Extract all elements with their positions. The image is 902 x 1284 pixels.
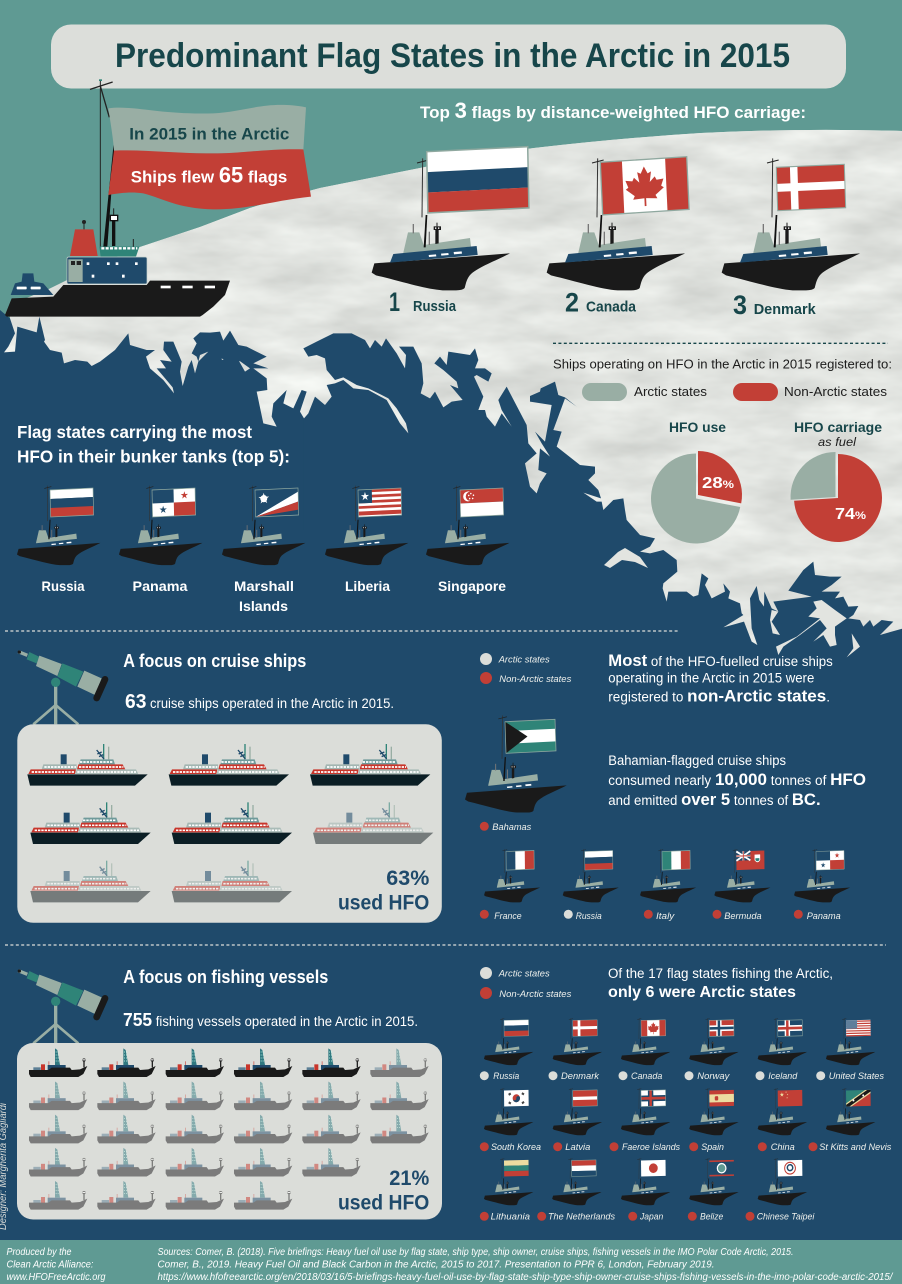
cruise flag: Italy bbox=[640, 849, 696, 922]
text: most cruise ships: Most of the HFO-fuelled cruise ships bbox=[608, 651, 833, 670]
text: most cruise ships bbox=[608, 651, 833, 706]
text: Bahamian-flagged: and emitted over 5 tonnes of BC. bbox=[608, 790, 821, 809]
top 3 heading: Top 3 flags by distance-weighted HFO carriage: bbox=[420, 98, 806, 123]
rank 2 Canada: 2 bbox=[565, 288, 579, 318]
text: 17 flag states: Of the 17 flag states fishing the Arctic, bbox=[608, 966, 833, 981]
flag ship: Latvia bbox=[553, 1088, 602, 1153]
producer credit: www.HFOFreeArctic.org bbox=[6, 1272, 106, 1283]
flag text: In 2015 in the Arctic bbox=[129, 124, 289, 144]
flag ship: Lithuania: Lithuania bbox=[491, 1212, 530, 1222]
flag ship: Chinese Taipei: Chinese Taipei bbox=[757, 1212, 815, 1222]
rank 3 Denmark bbox=[722, 158, 860, 320]
Bahamas ship: Bahamas bbox=[492, 822, 532, 833]
flag ship: Belize bbox=[688, 1158, 739, 1222]
top 5: Russia bbox=[17, 486, 100, 594]
pie chart: HFO carriage: 74% bbox=[835, 506, 866, 523]
heading: focus on fishing vessels: A focus on fishing vessels bbox=[123, 967, 328, 987]
flag text: Ships flew 65 flags bbox=[131, 162, 287, 188]
rank 2 Canada bbox=[547, 157, 689, 318]
legend: fishing bbox=[480, 967, 572, 1000]
top 5: Liberia: Liberia bbox=[345, 578, 390, 594]
stat: 63% used HFO: 63% bbox=[386, 867, 430, 890]
flag ship: The Netherlands: The Netherlands bbox=[548, 1212, 615, 1222]
text: Bahamian-flagged: Bahamian-flagged cruise ships bbox=[608, 753, 786, 768]
stat: 21% used HFO bbox=[338, 1167, 430, 1214]
sources bbox=[158, 1247, 894, 1283]
producer credit: Clean Arctic Alliance: bbox=[6, 1260, 94, 1270]
flag ship: South Korea bbox=[480, 1088, 541, 1153]
fishing flags row 1 bbox=[480, 1018, 884, 1082]
flag ship: Canada bbox=[618, 1018, 670, 1082]
cruise flag: France: France bbox=[494, 911, 522, 922]
title bbox=[51, 24, 846, 88]
rank 3 Denmark: 3 bbox=[733, 290, 747, 320]
sources: Sources: Comer, B. (2018). Five briefings: Heavy fuel oil use by flag state, ship type, ship owner, cruise ships, fishing vessels in the IMO Polar Code Arctic, 2015. bbox=[158, 1247, 794, 1258]
flag ship: Faeroe Islands: Faeroe Islands bbox=[622, 1142, 680, 1153]
registered-to legend: Non-Arctic states bbox=[784, 384, 888, 399]
top 5: Liberia bbox=[325, 486, 408, 594]
text: Bahamian-flagged: consumed nearly 10,000 tonnes of HFO bbox=[608, 770, 866, 789]
flag ship: Russia: Russia bbox=[493, 1071, 519, 1082]
top 5: Panama bbox=[119, 486, 202, 594]
stat: 63% used HFO bbox=[338, 867, 430, 914]
flag ship: Canada: Canada bbox=[631, 1071, 662, 1082]
heading: top 5 bbox=[17, 422, 290, 466]
telescope: cruise section bbox=[18, 650, 105, 724]
text: most cruise ships: registered to non-Arctic states. bbox=[608, 686, 830, 706]
flag ship: Norway bbox=[684, 1018, 739, 1082]
text: most cruise ships: operating in the Arctic in 2015 were bbox=[608, 670, 814, 686]
sources: Comer, B., 2019. Heavy Fuel Oil and Black Carbon in the Arctic, 2015 to 2017. Presentation to PPR 6, London, February 2019. bbox=[158, 1260, 714, 1270]
rank 3 Denmark: Denmark bbox=[754, 301, 816, 318]
ice fragments near the coast bbox=[604, 548, 860, 657]
cruise ship count: 63 cruise ships operated in the Arctic in 2015. bbox=[125, 691, 394, 713]
fishing flags row 3 bbox=[480, 1158, 815, 1222]
telescope: fishing section bbox=[18, 969, 105, 1043]
stat: 21% used HFO: 21% bbox=[389, 1167, 430, 1190]
panel: fishing vessels bbox=[17, 1043, 442, 1220]
stat: 63% used HFO: used HFO bbox=[338, 892, 429, 914]
flag ship: Iceland: Iceland bbox=[768, 1071, 798, 1082]
heading: top 5: Flag states carrying the most bbox=[17, 422, 252, 442]
rank 1 Russia: Russia bbox=[413, 298, 457, 315]
flag ship: St Kitts and Nevis: St Kitts and Nevis bbox=[819, 1142, 892, 1153]
heading: top 5: HFO in their bunker tanks (top 5): bbox=[17, 446, 290, 466]
pie chart: HFO carriage: HFO carriage bbox=[794, 419, 882, 435]
flag ship: China: China bbox=[771, 1142, 795, 1153]
ice field bbox=[0, 130, 902, 690]
pie chart: HFO carriage: as fuel bbox=[818, 435, 856, 449]
flag ship: Chinese Taipei bbox=[746, 1158, 815, 1222]
legend: fishing: Arctic states bbox=[498, 968, 550, 980]
flag text bbox=[129, 124, 289, 188]
pie chart: HFO use: HFO use bbox=[669, 419, 726, 435]
fishing flags row 2 bbox=[480, 1088, 892, 1153]
producer credit bbox=[6, 1247, 106, 1283]
flag ship: Belize: Belize bbox=[700, 1212, 723, 1222]
legend: cruise: Non-Arctic states bbox=[499, 674, 572, 685]
big flag bbox=[108, 105, 311, 209]
top 5: Marshall Islands: Islands bbox=[239, 598, 288, 614]
top 5: Panama: Panama bbox=[132, 578, 188, 594]
panel: cruise ships bbox=[17, 724, 442, 923]
pie chart: HFO carriage bbox=[791, 419, 882, 542]
fishing vessel icons bbox=[29, 1048, 429, 1210]
flag ship: Denmark: Denmark bbox=[561, 1071, 600, 1082]
flag ship: Spain: Spain bbox=[701, 1142, 724, 1153]
cruise ship icons bbox=[27, 744, 433, 902]
footer bbox=[0, 1240, 902, 1284]
flag ship: Iceland bbox=[756, 1018, 807, 1082]
rank 2 Canada: Canada bbox=[586, 298, 637, 316]
flag ship: South Korea: South Korea bbox=[491, 1142, 541, 1153]
flag ship: Faeroe Islands bbox=[610, 1088, 680, 1153]
cruise flag: Italy: Italy bbox=[656, 911, 676, 922]
registered-to legend: Ships operating on HFO in the Arctic in 2015 registered to: bbox=[553, 356, 892, 372]
registered-to legend bbox=[553, 356, 892, 401]
sea: dark blue water and coastline bbox=[0, 310, 902, 1284]
legend: cruise: Arctic states bbox=[498, 654, 550, 666]
flag ship: Norway: Norway bbox=[697, 1071, 731, 1082]
heading: focus on cruise ships: A focus on cruise ships bbox=[123, 651, 306, 671]
text: Bahamian-flagged bbox=[608, 753, 866, 809]
top 5: Marshall Islands: Marshall bbox=[234, 578, 294, 594]
top 5: Marshall Islands bbox=[222, 486, 305, 614]
pie chart: HFO use: 28 % bbox=[702, 475, 734, 492]
flag ship: Russia bbox=[480, 1018, 533, 1082]
pie chart: HFO use bbox=[651, 419, 742, 543]
main ship with big flag bbox=[5, 79, 311, 317]
title: Predominant Flag States in the Arctic in 2015 bbox=[115, 37, 790, 75]
cruise flag: Russia: Russia bbox=[576, 911, 602, 922]
fishing vessel count: 755 fishing vessels operated in the Arctic in 2015. bbox=[123, 1010, 418, 1030]
stat: 21% used HFO: used HFO bbox=[338, 1192, 429, 1214]
rank 1 Russia: 1 bbox=[389, 287, 400, 317]
producer credit: Produced by the bbox=[6, 1247, 72, 1258]
top 5: Singapore: Singapore bbox=[438, 578, 506, 594]
flag ship: The Netherlands bbox=[537, 1158, 615, 1222]
flag ship: Denmark bbox=[548, 1018, 602, 1082]
rank 1 Russia bbox=[372, 147, 529, 317]
flag ship: Japan: Japan bbox=[639, 1212, 663, 1222]
cruise flag: France bbox=[480, 849, 540, 922]
flag ship: Lithuania bbox=[480, 1158, 533, 1222]
cruise flag: Bermuda: Bermuda bbox=[724, 911, 762, 922]
flag ship: United States: United States bbox=[829, 1071, 884, 1082]
sources: https://www.hfofreearctic.org/en/2018/03/16/5-briefings-heavy-fuel-oil-use-by-flag-state-ship-type-ship-owner-cruise-ships-fishing-vessels-in-the-imo-polar-code-arctic-2015/ bbox=[158, 1272, 894, 1283]
cruise flag: Russia bbox=[563, 849, 619, 922]
flag ship: Japan bbox=[621, 1158, 670, 1222]
main ship bbox=[5, 79, 230, 317]
top 5: Singapore bbox=[426, 486, 509, 594]
legend: fishing: Non-Arctic states bbox=[499, 989, 572, 1000]
Bahamas ship bbox=[465, 716, 567, 833]
top 5: Russia: Russia bbox=[42, 578, 85, 594]
flag ship: St Kitts and Nevis bbox=[808, 1088, 892, 1153]
flag ship: United States bbox=[816, 1018, 884, 1082]
flag ship: China bbox=[758, 1088, 807, 1153]
registered-to legend: Arctic states bbox=[634, 384, 708, 399]
cruise flag: Bermuda bbox=[712, 849, 770, 922]
flag ship: Spain bbox=[689, 1088, 739, 1153]
flag ship: Latvia: Latvia bbox=[565, 1142, 590, 1153]
cruise flag: Panama: Panama bbox=[807, 911, 841, 922]
cruise flag: Panama bbox=[794, 849, 850, 922]
legend: cruise bbox=[480, 653, 572, 685]
text: 17 flag states: only 6 were Arctic states bbox=[608, 984, 796, 1001]
text: 17 flag states bbox=[608, 966, 833, 1001]
